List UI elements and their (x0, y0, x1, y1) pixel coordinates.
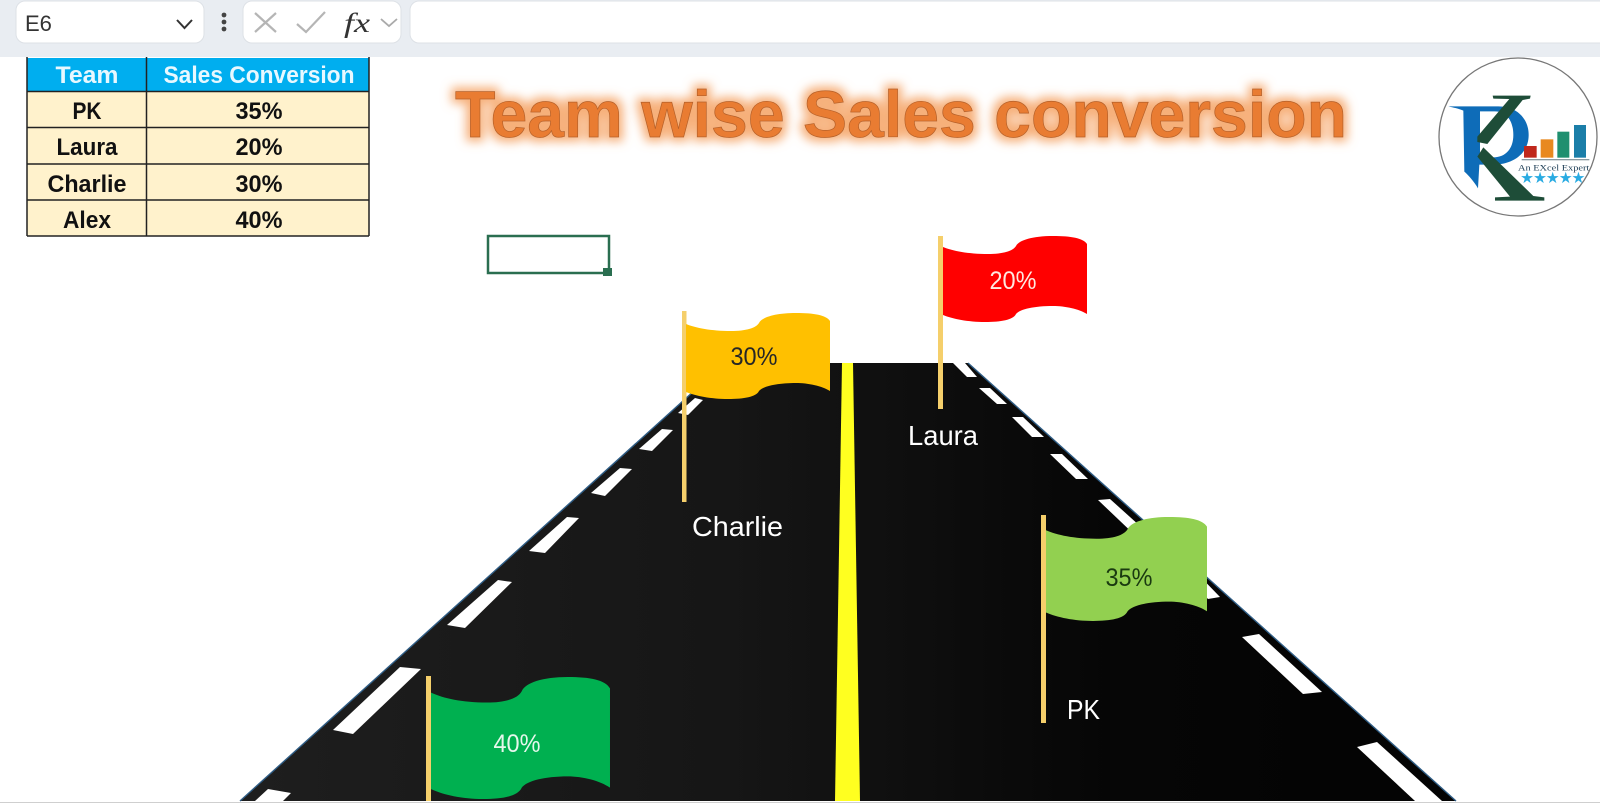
table rows: PK (72, 98, 102, 125)
logo stars (1520, 170, 1585, 187)
table header: Sales Conversion (164, 62, 354, 89)
table rows: 20% (236, 134, 282, 161)
logo stars: ★ (1546, 170, 1560, 187)
table rows (48, 98, 282, 234)
formula input (410, 1, 1600, 43)
table header: Team (56, 62, 118, 89)
table rows: 35% (236, 98, 282, 125)
title: Team wise Sales conversion (455, 77, 1347, 151)
logo stars: ★ (1533, 170, 1547, 187)
data table (27, 57, 369, 236)
logo (1439, 58, 1597, 216)
flag: Charlie: 30% (730, 343, 778, 371)
right lane dashes (953, 363, 1442, 801)
flag: PK: 35% (1106, 564, 1152, 592)
table header (56, 62, 354, 89)
flag: Alex: 40% (494, 730, 540, 758)
road (240, 363, 1456, 801)
logo letter P (1448, 106, 1529, 188)
logo tagline: An EXcel Expert (1518, 164, 1590, 173)
flag: Laura: 20% (990, 267, 1036, 295)
centre line (835, 363, 860, 801)
logo stars: ★ (1559, 170, 1573, 187)
logo stars: ★ (1520, 170, 1534, 187)
table rows: 40% (236, 207, 282, 234)
flag: Charlie (682, 311, 830, 542)
formula buttons (243, 1, 401, 43)
selected cell (488, 236, 612, 276)
name box: E6 (25, 11, 52, 36)
page bottom line (0, 802, 1600, 803)
road edge highlights (240, 363, 1456, 801)
table rows: Charlie (48, 171, 126, 198)
flag: PK (1041, 515, 1207, 725)
left lane dashes (255, 398, 703, 801)
logo letter K (1477, 96, 1544, 201)
flag: Laura (908, 236, 1087, 451)
flag: Charlie: Charlie (692, 511, 783, 542)
table rows: Alex (63, 207, 112, 234)
excel formula bar (0, 0, 1600, 57)
road surface (240, 363, 1456, 801)
flag: PK: PK (1067, 694, 1100, 725)
flag: Alex (426, 676, 610, 801)
table rows: Laura (56, 134, 118, 161)
table rows: 30% (236, 171, 282, 198)
formula buttons: fx (344, 8, 370, 38)
logo stars: ★ (1571, 170, 1585, 187)
flag: Laura: Laura (908, 420, 978, 451)
icon: more options dots (222, 13, 226, 31)
name box (16, 1, 204, 43)
logo bar chart (1522, 125, 1589, 160)
